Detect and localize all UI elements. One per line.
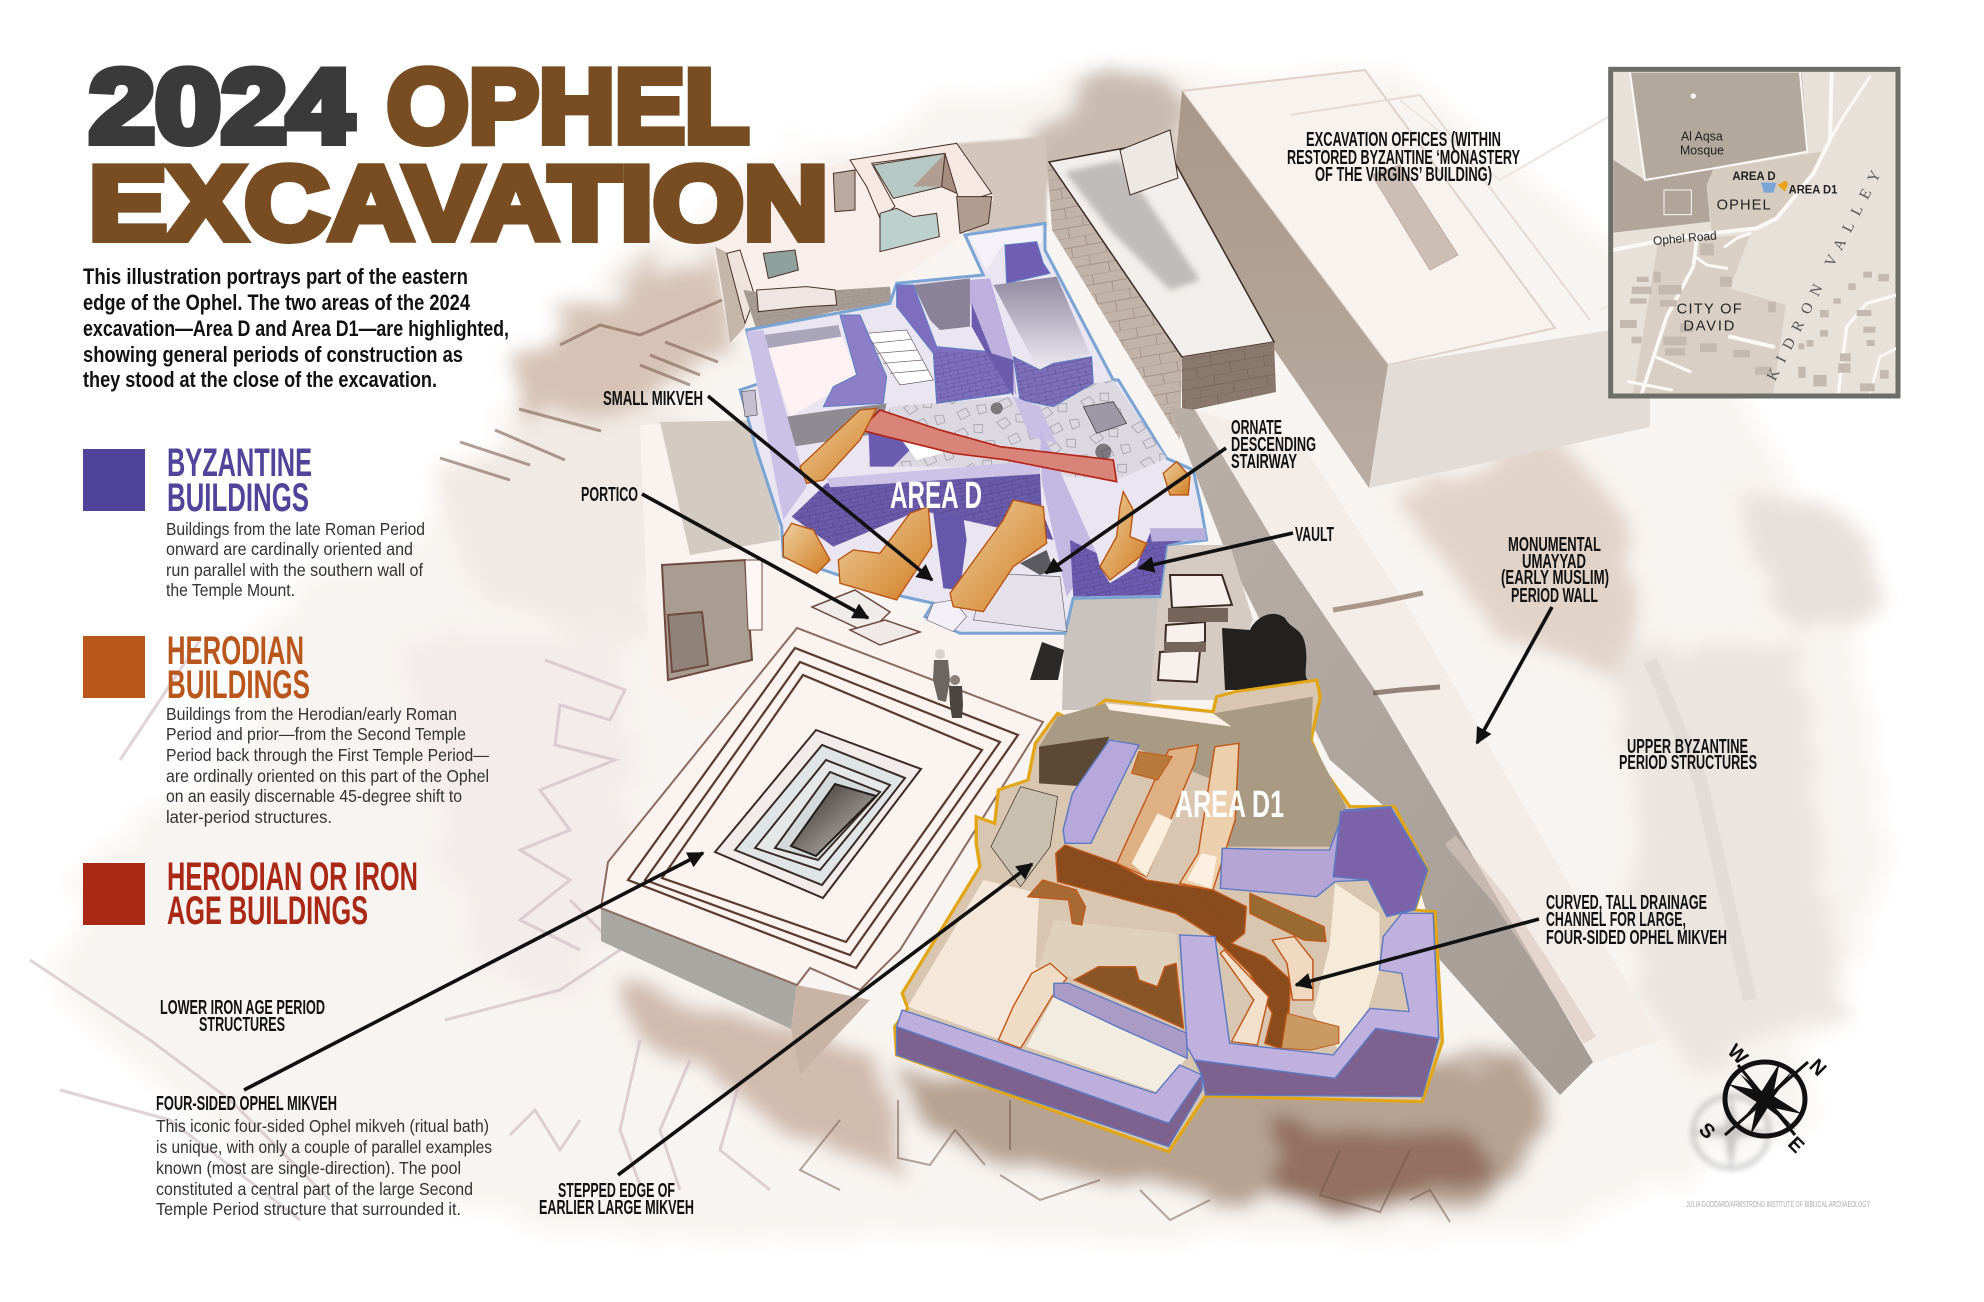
label: upper Byzantine structures: UPPER BYZANTINE [1627,736,1748,758]
legend: Herodian or Iron Age buildings [83,855,418,933]
red wall section [860,410,1117,482]
map roads [1613,73,1897,393]
area labels: AREA D1 [1175,784,1284,826]
legend: Byzantine buildings: run parallel with the southern wall of [166,560,423,580]
area D1 outline [895,680,1442,1152]
label: excavation offices: OF THE VIRGINS’ BUILDING) [1315,164,1492,186]
area D outline [740,223,1207,633]
label: stepped edge: STEPPED EDGE OF [558,1180,675,1202]
label: ornate descending stairway: DESCENDING [1231,434,1316,456]
legend: Herodian buildings: HERODIAN [167,629,304,673]
back floor [1039,697,1346,847]
legend: Herodian buildings: are ordinally oriented on this part of the Ophel [166,766,489,786]
callout: four-sided Ophel mikveh: FOUR-SIDED OPHEL MIKVEH [156,1093,337,1115]
inner pit stub [868,423,910,467]
callout: four-sided Ophel mikveh: known (most are single-direction). The pool [156,1158,461,1178]
legend: Herodian buildings: Period and prior—from the Second Temple [166,724,466,744]
label: lower Iron Age structures: LOWER IRON AGE PERIOD [160,997,325,1019]
inset locator map [1611,69,1898,396]
label: ornate descending stairway: ORNATE [1231,417,1282,439]
compass rose: W [1723,1040,1752,1069]
legend: Byzantine buildings: the Temple Mount. [166,580,295,600]
label: curved drainage channel [1546,892,1727,949]
map labels: DAVID [1683,319,1734,335]
label: vault: VAULT [1295,524,1334,546]
long wall [970,278,1017,397]
ground and portico between area D and the mikveh [640,420,1100,740]
label: stepped edge [539,1180,694,1219]
compass rose: S [1694,1119,1719,1144]
left room floor [763,325,857,417]
legend: Herodian buildings: BUILDINGS [167,663,310,707]
map labels: Mosque [1680,143,1724,157]
lower right wall [1070,533,1205,597]
area D1 highlight [895,680,1442,1152]
label: monumental wall: MONUMENTAL [1508,534,1601,556]
label: upper Byzantine structures: PERIOD STRUCTURES [1619,752,1757,774]
dark strokes on brown wash [440,300,722,480]
label: portico: PORTICO [581,484,638,506]
Byzantine walls [897,740,1439,1147]
back room [913,278,970,330]
label: monumental wall [1501,534,1609,607]
building: long wall block [1047,130,1276,440]
title [89,49,828,262]
building: excavation offices block [1172,70,1720,488]
map buildings [1620,243,1889,391]
label: excavation offices: EXCAVATION OFFICES (WITHIN [1306,129,1501,151]
label: stepped edge: EARLIER LARGE MIKVEH [539,1197,694,1219]
legend: Byzantine buildings [83,441,425,600]
label: curved drainage channel: CHANNEL FOR LARGE, [1546,909,1686,931]
area labels: AREA D [890,475,982,517]
intro text block: edge of the Ophel. The two areas of the 2024 [83,290,471,315]
orange wall sections [783,408,1190,612]
callout: four-sided Ophel mikveh: This iconic four-sided Ophel mikveh (ritual bath) [156,1116,489,1136]
compass rose [1694,1040,1830,1158]
legend: Byzantine buildings: Buildings from the late Roman Period [166,519,425,539]
compass rose: N [1805,1055,1830,1081]
back block [1005,242,1050,283]
sketch lines: surrounding ruins [30,640,770,1220]
label: monumental wall: (EARLY MUSLIM) [1501,567,1609,589]
intro text block: excavation—Area D and Area D1—are highlighted, [83,316,509,341]
label: upper Byzantine structures [1619,736,1757,774]
grey stone block [991,787,1058,887]
legend: Herodian or Iron Age buildings: AGE BUILDINGS [167,889,368,933]
label: ornate descending stairway [1231,417,1316,473]
intro text block: This illustration portrays part of the eastern [83,264,468,289]
callout: four-sided Ophel mikveh: constituted a central part of the large Second [156,1179,473,1199]
map labels: AREA D1 [1789,182,1838,196]
wall stubs [823,315,887,407]
central rubble floor [867,380,1167,480]
legend: Herodian buildings: Buildings from the Herodian/early Roman [166,704,457,724]
area markers [1761,183,1777,193]
legend: Herodian or Iron Age buildings: HERODIAN OR IRON [167,855,418,899]
title: EXCAVATION [89,146,828,262]
label: ornate descending stairway: STAIRWAY [1231,451,1297,473]
intro text block: they stood at the close of the excavation. [83,367,437,392]
right room floor [993,277,1090,367]
label: excavation offices [1287,129,1520,186]
credit line: JULIA GODDARD/ARMSTRONG INSTITUTE OF BIBLICAL ARCHAEOLOGY [1686,1200,1870,1209]
legend: Byzantine buildings: BYZANTINE [167,441,312,485]
map labels: CITY OF [1677,301,1742,317]
legend: Byzantine buildings: onward are cardinally oriented and [166,539,413,559]
title: OPHEL [387,49,749,165]
right long wall [1040,427,1097,597]
label: excavation offices: RESTORED BYZANTINE ‘MONASTERY [1287,147,1520,169]
label: monumental wall: UMAYYAD [1522,551,1586,573]
four-sided mikveh structure [601,628,1043,1075]
label: curved drainage channel: CURVED, TALL DRAINAGE [1546,892,1707,914]
legend: Byzantine buildings: BUILDINGS [167,476,309,520]
callout: four-sided Ophel mikveh: is unique, with only a couple of parallel examples [156,1137,492,1157]
label: lower Iron Age structures [160,997,325,1036]
figures standing at edge of mikveh [933,649,963,718]
wall: monumental Umayyad period wall [1169,406,1750,1095]
building: upper north structures [713,137,1047,343]
title: 2024 [89,49,353,165]
label: lower Iron Age structures: STRUCTURES [199,1014,285,1036]
map areas [1630,73,1808,180]
legend: Herodian buildings: Period back through the First Temple Period— [166,745,489,765]
legend: Herodian buildings [83,629,489,827]
callout: four-sided Ophel mikveh: Temple Period structure that surrounded it. [156,1199,461,1219]
intro text block: showing general periods of construction as [83,342,463,367]
left wall [747,330,807,520]
map labels: AREA D [1732,169,1776,183]
map labels: Ophel Road [1652,228,1717,248]
front wall [792,473,1053,547]
legend: Herodian buildings: on an easily discernable 45-degree shift to [166,786,462,806]
area labels [890,475,1284,826]
map labels: OPHEL [1717,197,1771,213]
top tab [968,226,1042,270]
lower floor [908,880,1054,1047]
arrows [244,396,1552,1175]
area D highlight [740,223,1207,633]
label: small mikveh: SMALL MIKVEH [603,388,703,410]
legend: Herodian buildings: later-period structures. [166,807,332,827]
Herodian walls [1056,845,1291,1048]
cracks below area D1 [800,1100,1450,1222]
compass rose: E [1783,1133,1808,1158]
stairs [867,330,933,385]
label: monumental wall: PERIOD WALL [1511,585,1598,607]
map labels: Al Aqsa [1681,130,1724,144]
compass rose shadow [1687,1090,1775,1174]
callout: four-sided Ophel mikveh [156,1093,492,1219]
map labels: KIDRON VALLEY [1763,168,1884,383]
map labels [1652,130,1884,383]
stairway, ground and tree near area D1 [1030,545,1308,710]
label: curved drainage channel: FOUR-SIDED OPHEL MIKVEH [1546,927,1727,949]
bottom steps [973,573,1067,632]
intro text block [83,264,509,392]
